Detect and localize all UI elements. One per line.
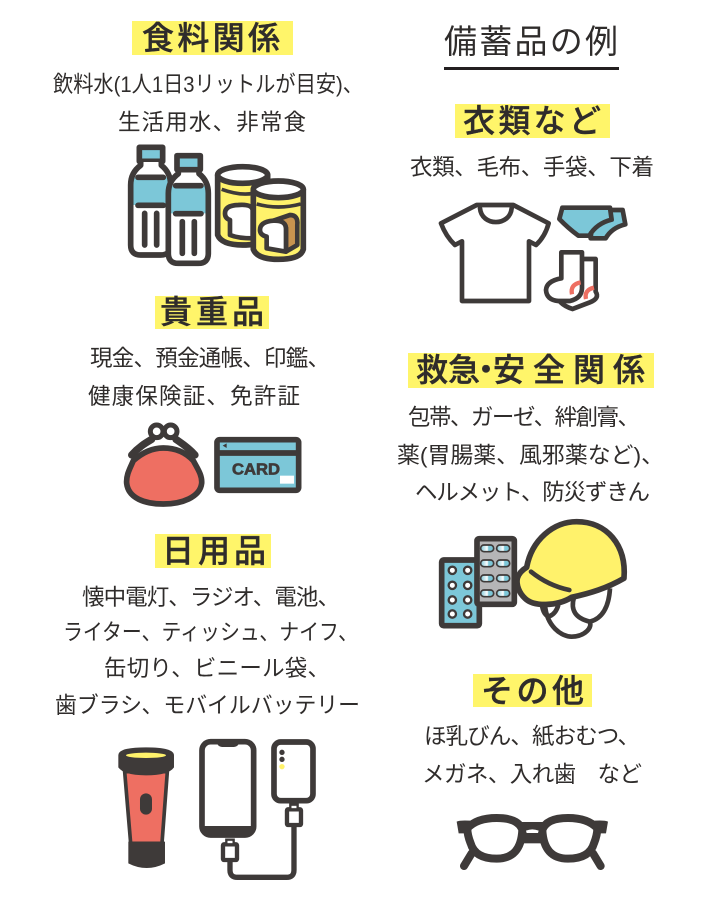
icon: flashlight, phone and power bank [118,742,313,877]
text: valuables items: 健康保険証、免許証 [88,384,300,409]
icon: socks [546,252,597,309]
icon: t-shirt [441,205,549,301]
panel: stockpile title [444,23,619,70]
text: food items: 生活用水、非常食 [118,110,306,135]
panel: valuables [88,294,330,504]
text: food items: 飲料水(1人1日3リットルが目安)、 [53,72,363,97]
icon: smartphone [202,742,254,835]
heading: food: 食料関係 [142,20,280,56]
text: first aid items [397,405,664,505]
icon: blue blister pack [442,560,479,626]
text: daily goods items: ライター、ティッシュ、ナイフ、 [63,620,358,645]
heading: clothing: 衣類など [463,103,601,139]
heading: first aid and safety [408,352,654,388]
text: food items [53,72,363,135]
text: daily goods items: 缶切り、ビニール袋、 [104,656,330,681]
heading: daily goods: 日用品 [162,533,266,569]
icon: underwear [559,208,625,238]
icon: yellow helmet [517,522,624,604]
icon: water bottles and bread cans [131,147,303,263]
heading: other: その他 [481,673,584,709]
text: first aid items: 薬(胃腸薬、風邪薬など)、 [397,443,664,468]
text: daily goods items: 懐中電灯、ラジオ、電池、 [82,585,340,610]
heading: valuables: 貴重品 [160,294,264,330]
heading: first aid and safety: 救急 [416,352,480,388]
icon: helmet straps [542,588,610,637]
heading: first aid and safety: 安全関係 [493,352,645,388]
icon: glasses [457,818,608,866]
text: other items: メガネ、入れ歯 など [422,762,642,787]
text: daily goods items: 歯ブラシ、モバイルバッテリー [55,693,360,718]
text: other items [422,724,642,787]
icon: purse and card [127,425,299,504]
panel: other [422,673,642,866]
icon: medicine and helmet [442,522,624,637]
text: first aid items: 包帯、ガーゼ、絆創膏、 [408,405,640,430]
text: other items: ほ乳びん、紙おむつ、 [424,724,640,749]
panel: daily goods [55,533,360,877]
text: daily goods items [55,585,360,718]
panel: food [53,20,363,263]
text: valuables items: 現金、預金通帳、印鑑、 [90,346,330,371]
text: valuables items [88,346,330,409]
icon: coin purse [127,425,202,504]
icon: flashlight [118,747,174,868]
icon: card [217,440,299,490]
icon: power bank and cable [223,742,313,877]
icon: card: CARD [232,461,280,478]
panel: clothing [410,103,654,309]
panel: first aid and safety [397,352,664,637]
title: 備蓄品の例 [444,23,618,60]
heading: first aid and safety: ・ [470,352,502,388]
title underline [444,67,619,70]
text: clothing items: 衣類、毛布、手袋、下着 [410,155,654,180]
text: first aid items: ヘルメット、防災ずきん [415,480,650,505]
icon: grey blister pack [477,539,514,604]
icon: t-shirt, underwear, socks [441,205,625,309]
